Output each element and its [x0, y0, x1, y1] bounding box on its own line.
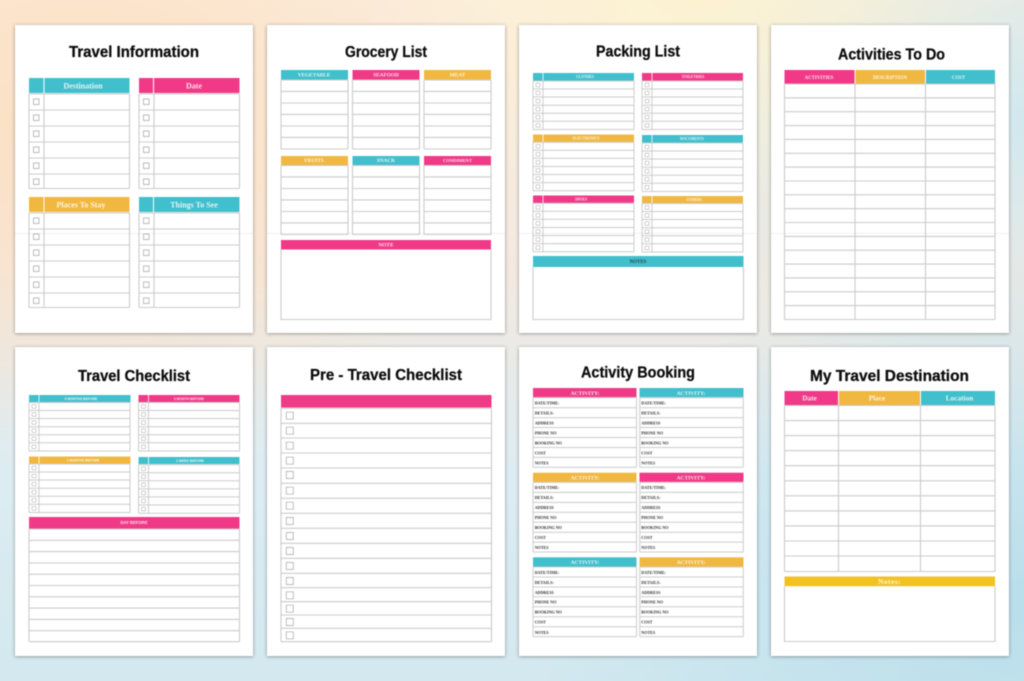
- notes box: [784, 576, 995, 642]
- booking card 6: DETAILS:: [641, 580, 660, 585]
- table: places to stay: Places To Stay: [57, 200, 105, 210]
- booking card 4: ACTIVITY:: [677, 476, 706, 482]
- table: clothes: CLOTHES: [576, 75, 594, 79]
- panel: packing list: [519, 25, 757, 333]
- panel: my travel destination: [771, 347, 1009, 656]
- booking card 3: ACTIVITY:: [571, 476, 600, 482]
- booking card 4: BOOKING NO: [641, 525, 668, 530]
- booking card 3: [533, 473, 636, 552]
- booking card 5: DATE/TIME:: [535, 570, 559, 575]
- table: date: [139, 78, 240, 188]
- booking card 6: ACTIVITY:: [677, 560, 706, 566]
- column: snack: SNACK: [377, 158, 396, 164]
- column: meat: MEAT: [450, 72, 466, 78]
- booking card 5: COST: [535, 620, 546, 625]
- column: vegetable: [281, 70, 348, 149]
- table: destination: [29, 78, 130, 188]
- panel: travel information: [15, 25, 253, 333]
- table: toiletries: [642, 73, 743, 130]
- booking card 5: ACTIVITY:: [571, 560, 600, 566]
- booking card 1: DETAILS:: [535, 410, 554, 416]
- booking card 4: NOTES: [641, 545, 656, 550]
- booking card 1: BOOKING NO: [535, 440, 562, 445]
- title: Activity Booking: [581, 364, 695, 382]
- booking card 6: [640, 557, 744, 637]
- table: 3 month before: [138, 395, 240, 451]
- notes box: Notes:: [878, 577, 901, 586]
- table: day before: DAY BEFORE: [120, 520, 148, 525]
- booking card 5: [533, 557, 636, 637]
- column: fruits: FRUITS: [304, 158, 324, 164]
- booking card 1: [533, 388, 636, 467]
- table: others: [642, 196, 743, 252]
- notes box: NOTES: [630, 260, 647, 265]
- booking card 6: DATE/TIME:: [641, 570, 666, 575]
- booking card 6: NOTES: [641, 630, 656, 635]
- table header: ACTIVITIES: [805, 76, 834, 81]
- table: 1 week before: [138, 457, 240, 513]
- column: condiment: CONDIMENT: [443, 158, 472, 163]
- title: My Travel Destination: [810, 368, 969, 385]
- booking card 4: DETAILS:: [641, 495, 660, 500]
- column: snack: [352, 156, 420, 234]
- panel: grocery list: [267, 25, 505, 333]
- booking card 4: ADDRESS: [641, 505, 661, 510]
- title: Travel Checklist: [78, 368, 191, 385]
- booking card 2: [640, 388, 744, 467]
- booking card 2: DETAILS:: [641, 410, 660, 416]
- column: meat: [424, 70, 491, 149]
- title: Pre - Travel Checklist: [310, 367, 463, 384]
- booking card 1: COST: [535, 450, 546, 455]
- table: documents: DOCUMENTS: [680, 137, 704, 141]
- booking card 5: BOOKING NO: [535, 610, 562, 615]
- header bar: [281, 395, 492, 408]
- table: documents: [642, 135, 743, 192]
- booking card 4: [640, 473, 744, 552]
- table: destination: Destination: [63, 82, 103, 90]
- table: things to see: [139, 197, 240, 308]
- table: shoes: [533, 196, 634, 252]
- booking card 2: NOTES: [641, 460, 656, 466]
- booking card 2: ACTIVITY:: [677, 391, 706, 397]
- booking card 5: NOTES: [535, 630, 549, 635]
- table: 3 month before: 3 MONTH BEFORE: [174, 397, 205, 401]
- booking card 5: DETAILS:: [535, 580, 554, 585]
- booking card 2: BOOKING NO: [641, 440, 668, 445]
- booking card 6: PHONE NO: [641, 600, 663, 605]
- title: Packing List: [596, 44, 681, 60]
- panel: activities to do: [771, 25, 1009, 333]
- booking card 2: COST: [641, 450, 653, 455]
- checklist rows: [281, 408, 492, 642]
- table: 1 week before: 1 WEEK BEFORE: [176, 459, 205, 463]
- table grid: [784, 406, 995, 572]
- table header: DESCRIPTION: [873, 76, 907, 81]
- booking card 2: DATE/TIME:: [641, 400, 666, 406]
- column: seafood: SEAFOOD: [373, 72, 399, 78]
- table header: [784, 70, 995, 84]
- table header: COST: [952, 76, 966, 81]
- booking card 2: PHONE NO: [641, 430, 663, 435]
- booking card 3: DATE/TIME:: [535, 485, 559, 490]
- booking card 1: ACTIVITY:: [571, 391, 600, 397]
- table: clothes: [533, 73, 634, 130]
- panel: activity booking: [519, 347, 757, 656]
- table header: [784, 391, 995, 405]
- table header: Date: [802, 394, 818, 402]
- booking card 1: ADDRESS: [535, 420, 555, 426]
- booking card 4: PHONE NO: [641, 515, 663, 520]
- booking card 5: PHONE NO: [535, 600, 556, 605]
- booking card 6: BOOKING NO: [641, 610, 668, 615]
- booking card 3: ADDRESS: [535, 505, 555, 510]
- table: 6 months before: 6 MONTHS BEFORE: [65, 397, 98, 401]
- table: day before: [29, 517, 240, 642]
- panel: pre-travel checklist: [267, 347, 505, 656]
- table: others: OTHERS: [686, 198, 702, 202]
- table: toiletries: TOILETRIES: [682, 75, 704, 79]
- booking card 3: COST: [535, 535, 546, 540]
- table: 1 months before: 1 MONTHS BEFORE: [67, 458, 100, 462]
- table: shoes: SHOES: [575, 198, 587, 202]
- column: fruits: [281, 156, 348, 234]
- booking card 6: ADDRESS: [641, 590, 661, 595]
- note box: [281, 240, 491, 320]
- table: things to see: Things To See: [170, 200, 218, 210]
- table: electronics: ELECTRONICS: [573, 136, 599, 140]
- booking card 3: BOOKING NO: [535, 525, 562, 530]
- panel: travel checklist: [15, 347, 253, 656]
- column: vegetable: VEGETABLE: [298, 72, 331, 78]
- note box: NOTE: [378, 242, 394, 248]
- booking card 3: NOTES: [535, 545, 549, 550]
- booking card 6: COST: [641, 620, 653, 625]
- table: 6 months before: [29, 395, 130, 451]
- title: Activities To Do: [838, 46, 945, 64]
- title: Grocery List: [345, 44, 428, 61]
- table: electronics: [533, 134, 634, 191]
- booking card 1: PHONE NO: [535, 430, 556, 435]
- column: seafood: [352, 70, 420, 149]
- table: date: Date: [186, 82, 202, 90]
- table header: Location: [946, 394, 973, 402]
- booking card 4: DATE/TIME:: [641, 485, 666, 490]
- booking card 3: PHONE NO: [535, 515, 556, 520]
- booking card 2: ADDRESS: [641, 420, 661, 426]
- booking card 3: DETAILS:: [535, 495, 554, 500]
- booking card 4: COST: [641, 535, 653, 540]
- notes box: [533, 256, 744, 320]
- booking card 1: NOTES: [535, 460, 549, 466]
- booking card 5: ADDRESS: [535, 590, 555, 595]
- table: places to stay: [29, 197, 130, 308]
- booking card 1: DATE/TIME:: [535, 400, 559, 406]
- table: 1 months before: [29, 456, 130, 512]
- table header: Place: [869, 394, 886, 402]
- title: Travel Information: [69, 44, 199, 61]
- table grid: [784, 84, 995, 320]
- column: condiment: [424, 156, 491, 234]
